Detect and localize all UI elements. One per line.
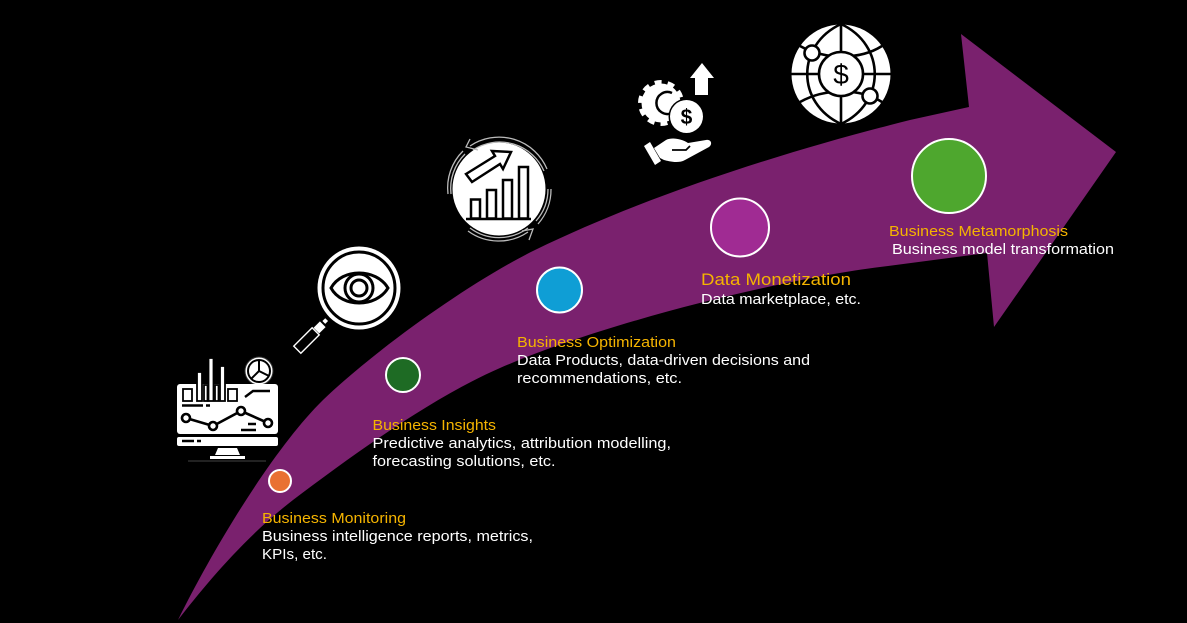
text: business monitoring: KPIs, etc.	[262, 546, 327, 563]
text: business optimization	[517, 334, 810, 387]
text: business metamorphosis: Business Metamorphosis	[889, 223, 1068, 240]
baseline	[466, 218, 531, 220]
coin face	[670, 100, 703, 133]
icon: gear coin and hand	[640, 63, 714, 165]
line chart	[182, 407, 272, 430]
finger line	[672, 146, 690, 150]
coin	[668, 98, 704, 134]
gear hub arc	[656, 92, 672, 114]
screen	[177, 384, 278, 434]
center coin	[819, 52, 863, 96]
gear teeth	[640, 82, 682, 124]
text: business optimization: recommendations, etc.	[517, 370, 682, 387]
handle	[294, 316, 331, 353]
text: business optimization: Data Products, data-driven decisions and	[517, 352, 810, 369]
disk	[452, 142, 546, 236]
chart bars on screen	[183, 358, 237, 401]
foot	[210, 456, 245, 459]
milestone dot: dark green	[386, 358, 420, 392]
circular arrows	[448, 137, 551, 241]
node top left	[804, 46, 820, 60]
text: business monitoring: Business Monitoring	[262, 510, 406, 527]
text: data monetization: Data marketplace, etc.	[701, 291, 861, 308]
milestone dot: magenta	[711, 198, 769, 256]
text: business monitoring	[262, 510, 533, 563]
base details	[182, 440, 201, 442]
eye	[331, 273, 388, 303]
screen details	[182, 391, 270, 430]
iris	[345, 274, 373, 302]
meridians and parallels	[791, 24, 891, 124]
icon: globe with dollar	[791, 24, 891, 124]
hand	[654, 139, 711, 162]
text: business insights	[372, 417, 671, 470]
icon: growth chart	[448, 137, 551, 241]
desk line	[188, 460, 266, 462]
monitor base	[177, 437, 278, 446]
text: data monetization	[701, 270, 861, 308]
pie chart	[245, 357, 273, 385]
text: data monetization: Data Monetization	[701, 270, 851, 289]
pupil	[351, 280, 367, 296]
dollar sign: $	[681, 106, 693, 129]
icon: monitor dashboard	[177, 357, 278, 461]
text: business metamorphosis: Business model transformation	[892, 241, 1114, 258]
lens	[318, 246, 400, 330]
milestone dot: blue	[537, 268, 582, 312]
text: business monitoring: Business intelligence reports, metrics,	[262, 528, 533, 545]
milestone dot: green	[912, 139, 986, 213]
bars	[471, 167, 528, 218]
lens rings	[323, 252, 395, 324]
dollar sign: $	[833, 59, 849, 90]
text: business metamorphosis	[889, 223, 1114, 258]
text: business insights: forecasting solutions, etc.	[372, 453, 556, 470]
curved rising arrow	[178, 34, 1116, 620]
globe disk	[792, 24, 890, 124]
gear	[642, 84, 680, 122]
text: business insights: Predictive analytics, attribution modelling,	[372, 435, 671, 452]
arrow	[466, 151, 511, 182]
cuff	[644, 142, 661, 165]
text: business insights: Business Insights	[372, 417, 496, 434]
node bottom right	[862, 88, 878, 104]
stand	[215, 448, 240, 455]
icon: magnifier with eye	[294, 246, 400, 353]
text: business optimization: Business Optimization	[517, 334, 676, 351]
up arrow	[690, 63, 714, 95]
milestone dot: orange	[269, 470, 291, 492]
